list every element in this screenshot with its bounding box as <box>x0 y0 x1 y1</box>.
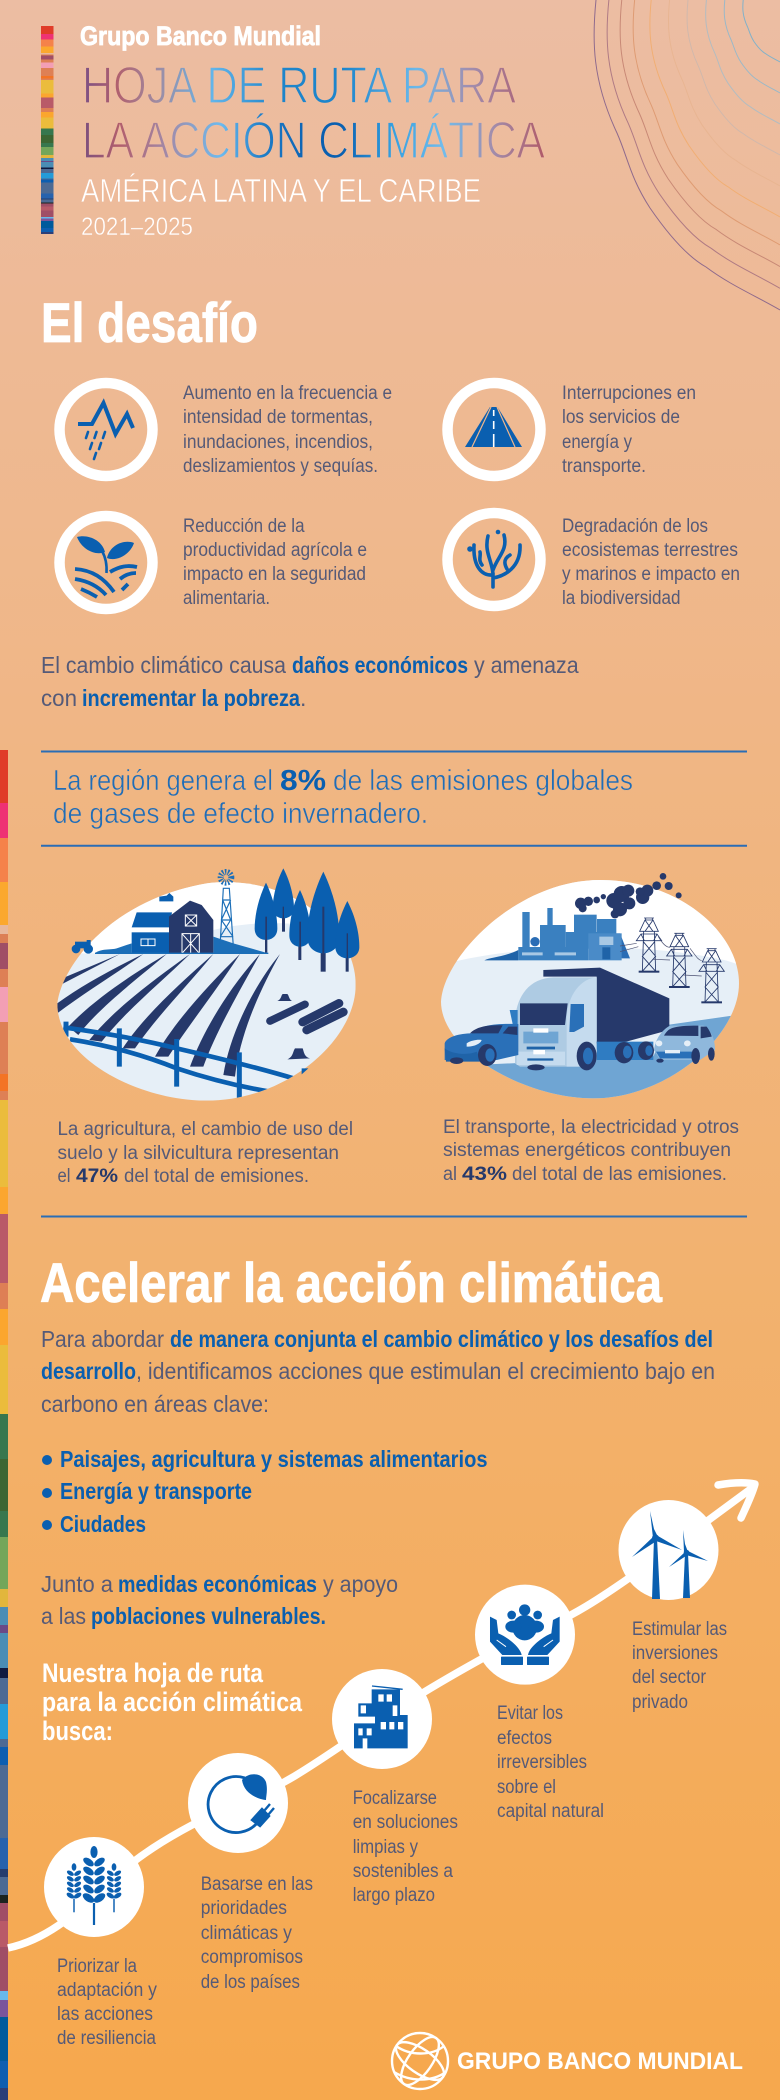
text: economic damage: El cambio climático causa <box>41 652 286 678</box>
text: energy emissions: El transporte, la electricidad y otros <box>443 1117 739 1138</box>
text: natural capital: Evitar los <box>497 1703 563 1724</box>
heading: roadmap: busca: <box>42 1716 113 1746</box>
list: key areas: Ciudades <box>60 1511 146 1537</box>
text: country priorities: climáticas y <box>201 1923 292 1944</box>
text: economic damage: daños económicos <box>292 652 468 678</box>
text: agriculture emissions: 47% <box>76 1165 118 1187</box>
list: key areas: Paisajes, agricultura y sistemas alimentarios <box>60 1446 488 1472</box>
text: agriculture: impacto en la seguridad <box>183 564 366 585</box>
heading: Acelerar la acción climática: Acelerar la acción climática <box>40 1251 663 1314</box>
text: private investment: del sector <box>632 1667 707 1688</box>
text: agriculture: alimentaria. <box>183 588 270 609</box>
text: adaptation: de resiliencia <box>57 2028 156 2049</box>
text: energy emissions: 43% <box>462 1163 507 1185</box>
callout: 8 percent: de gases de efecto invernadero. <box>53 798 428 830</box>
text: economic measures: y apoyo <box>323 1571 398 1597</box>
smoke <box>575 873 682 918</box>
text: storms: inundaciones, incendios, <box>183 432 373 453</box>
title: HOJA DE RUTA PARA <box>82 57 516 115</box>
fence <box>63 1022 297 1098</box>
logo: Grupo Banco Mundial <box>390 2031 743 2091</box>
text: country priorities <box>201 1874 313 1993</box>
trees <box>255 868 359 958</box>
illustration: farm and forest <box>50 867 367 1107</box>
text: economic measures <box>41 1571 398 1629</box>
step 5: private investment <box>618 1500 727 1713</box>
text: clean solutions: Focalizarse <box>353 1788 437 1809</box>
farm buildings <box>95 893 268 953</box>
illustration: energy and transport <box>440 870 740 1103</box>
text: infrastructure <box>562 383 696 477</box>
text: infrastructure: los servicios de <box>562 407 680 428</box>
windmill <box>220 872 233 947</box>
text: ecosystems: Degradación de los <box>562 516 708 537</box>
text: country priorities: de los países <box>201 1972 300 1993</box>
text: private investment: privado <box>632 1692 688 1713</box>
text: energy emissions: del total de las emisiones. <box>512 1164 727 1185</box>
text: introduction: carbono en áreas clave: <box>41 1391 269 1417</box>
car: right <box>654 1026 715 1064</box>
text: natural capital <box>497 1703 604 1822</box>
text: natural capital: capital natural <box>497 1801 604 1822</box>
text: economic damage: . <box>300 685 306 711</box>
text: introduction: Para abordar <box>41 1326 164 1352</box>
challenge: agriculture <box>60 516 367 609</box>
callout: 8 percent: de las emisiones globales <box>333 765 633 797</box>
text: natural capital: sobre el <box>497 1777 556 1798</box>
text: private investment: inversiones <box>632 1643 718 1664</box>
text: clean solutions: limpias y <box>353 1837 418 1858</box>
text: adaptation: adaptación y <box>57 1980 157 2001</box>
logs and stumps <box>270 994 343 1059</box>
text: economic damage: y amenaza <box>474 652 579 678</box>
step 2: country priorities <box>188 1753 313 1993</box>
icon: buildings <box>332 1669 432 1769</box>
text: infrastructure: Interrupciones en <box>562 383 696 404</box>
text: agriculture emissions: del total de emisiones. <box>124 1166 309 1187</box>
text: introduction: desarrollo <box>41 1358 136 1384</box>
icon: wind turbines <box>618 1500 718 1600</box>
text: storms: Aumento en la frecuencia e <box>183 383 392 404</box>
text: infrastructure: transporte. <box>562 456 646 477</box>
icon: road <box>448 383 540 476</box>
icon: coral <box>448 513 540 606</box>
text: country priorities: prioridades <box>201 1898 287 1919</box>
text: agriculture: productividad agrícola e <box>183 540 367 561</box>
text: ecosystems <box>562 516 740 609</box>
step 3: clean solutions <box>332 1669 458 1906</box>
title <box>82 57 545 170</box>
text: agriculture <box>183 516 367 609</box>
text: adaptation: Priorizar la <box>57 1956 137 1977</box>
divider lines <box>41 752 747 1216</box>
text: adaptation <box>57 1956 157 2049</box>
list: key areas: Energía y transporte <box>60 1478 252 1504</box>
power plant <box>484 908 630 960</box>
tree trunks <box>265 897 349 972</box>
list: key areas <box>42 1446 488 1537</box>
heading: roadmap: Nuestra hoja de ruta <box>42 1658 264 1688</box>
text: clean solutions: largo plazo <box>353 1885 435 1906</box>
text: agriculture emissions <box>58 1119 353 1187</box>
icon: plant and fields <box>60 516 152 609</box>
organisation name: Grupo Banco Mundial <box>80 21 321 51</box>
text: storms: intensidad de tormentas, <box>183 407 373 428</box>
text: infrastructure: energía y <box>562 432 632 453</box>
step 4: natural capital <box>475 1585 604 1822</box>
icon: leaf and plug <box>188 1753 288 1853</box>
text: ecosystems: y marinos e impacto en <box>562 564 740 585</box>
car: left <box>445 1024 518 1066</box>
heading: El desafío: El desafío <box>41 291 258 354</box>
text: energy emissions: al <box>443 1164 457 1185</box>
decorative contour lines <box>594 0 780 310</box>
text: agriculture emissions: suelo y la silvicultura representan <box>58 1143 339 1164</box>
text: economic measures: medidas económicas <box>118 1571 317 1597</box>
text: introduction: , identificamos acciones que estimulan el crecimiento bajo en <box>136 1358 715 1384</box>
icon: wheat <box>44 1837 144 1937</box>
text: clean solutions: sostenibles a <box>353 1861 453 1882</box>
text: clean solutions: en soluciones <box>353 1812 458 1833</box>
horizon and furrows <box>55 953 297 1098</box>
challenge: storms <box>60 383 392 477</box>
text: country priorities: Basarse en las <box>201 1874 313 1895</box>
step 1: adaptation <box>44 1837 157 2049</box>
wordmark: GRUPO BANCO MUNDIAL <box>457 2048 743 2075</box>
challenge: ecosystems <box>448 513 740 609</box>
header <box>41 21 545 241</box>
text: private investment: Estimular las <box>632 1619 727 1640</box>
text: storms <box>183 383 392 477</box>
icon: storm and rain <box>60 383 152 476</box>
text: private investment <box>632 1619 727 1713</box>
text: introduction <box>41 1326 715 1417</box>
text: ecosystems: la biodiversidad <box>562 588 680 609</box>
text: economic damage: incrementar la pobreza <box>82 685 300 711</box>
text: adaptation: las acciones <box>57 2004 153 2025</box>
icon: hands holding people <box>475 1585 575 1685</box>
period: 2021–2025 <box>81 213 193 241</box>
arrow: rising roadmap path <box>8 1483 755 1948</box>
text: energy emissions <box>443 1117 739 1185</box>
text: storms: deslizamientos y sequías. <box>183 456 378 477</box>
decorative colour strip: left edge <box>0 750 8 2100</box>
text: economic measures: Junto a <box>41 1571 113 1597</box>
text: economic damage: con <box>41 685 77 711</box>
callout: 8 percent: La región genera el <box>53 765 273 797</box>
text: country priorities: compromisos <box>201 1947 303 1968</box>
text: natural capital: efectos <box>497 1728 552 1749</box>
tractor <box>72 940 93 954</box>
text: economic measures: a las <box>41 1603 86 1629</box>
heading: roadmap <box>42 1658 303 1746</box>
text: agriculture emissions: La agricultura, el cambio de uso del <box>58 1119 353 1140</box>
decorative colour strip: header <box>41 26 53 234</box>
electricity pylons <box>620 918 724 1003</box>
text: natural capital: irreversibles <box>497 1752 587 1773</box>
text: agriculture: Reducción de la <box>183 516 305 537</box>
heading: roadmap: para la acción climática <box>42 1687 303 1717</box>
text: energy emissions: sistemas energéticos contribuyen <box>443 1140 731 1161</box>
callout: 8 percent <box>53 765 633 830</box>
text: agriculture emissions: el <box>58 1166 70 1187</box>
challenge: infrastructure <box>448 383 696 477</box>
text: ecosystems: ecosistemas terrestres <box>562 540 738 561</box>
text: clean solutions <box>353 1788 458 1906</box>
icon: globe <box>390 2031 450 2091</box>
subtitle: AMÉRICA LATINA Y EL CARIBE <box>81 172 481 209</box>
callout: 8 percent: 8% <box>280 765 326 797</box>
text: economic measures: poblaciones vulnerables. <box>91 1603 326 1629</box>
truck <box>510 968 669 1070</box>
title: LA ACCIÓN CLIMÁTICA <box>82 112 545 170</box>
text: economic damage <box>41 652 579 711</box>
